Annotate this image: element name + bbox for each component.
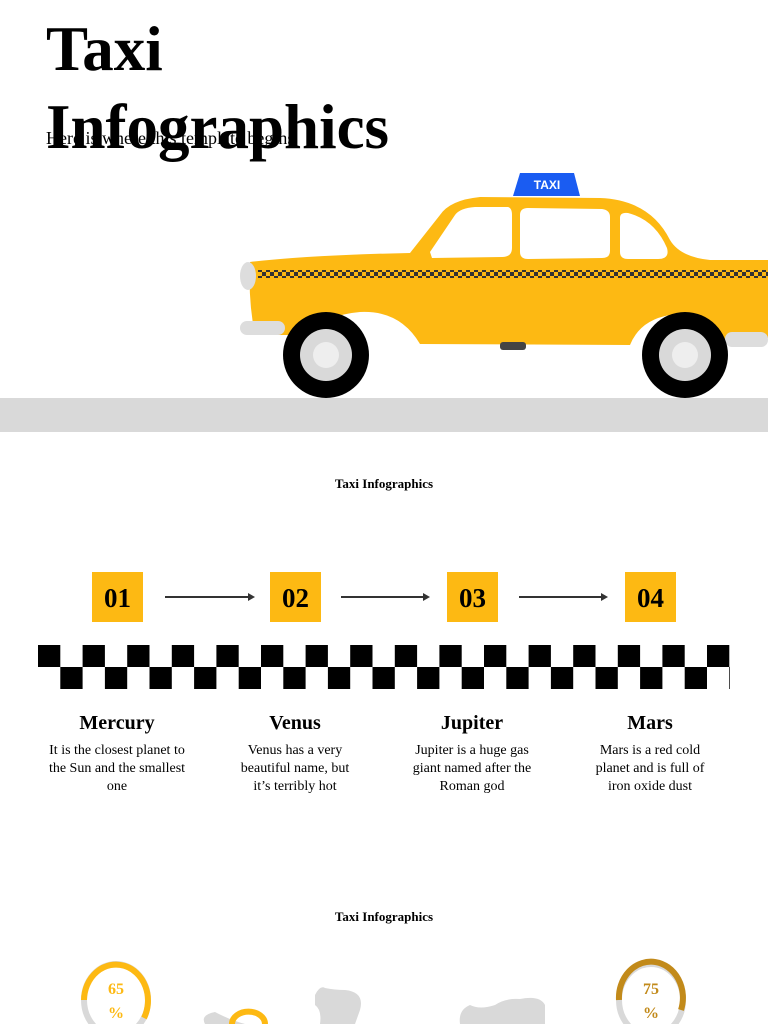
checkered band	[38, 645, 730, 689]
step numbers: 03	[459, 583, 486, 613]
chart: rings and map: 75	[643, 981, 659, 998]
step numbers: 04	[637, 583, 664, 613]
steps text: Venus has a very beautiful name, but it’s terribly hot	[241, 743, 349, 794]
steps text: Jupiter is a huge gas giant named after the Roman god	[413, 743, 531, 794]
illustration: taxi	[240, 173, 768, 398]
steps text: Jupiter	[441, 712, 503, 734]
illustration: taxi: TAXI	[534, 178, 560, 192]
steps text: It is the closest planet to the Sun and the smallest one	[49, 743, 185, 794]
chart: rings and map: 65	[108, 981, 124, 998]
chart: rings and map: %	[643, 1005, 659, 1022]
title: Infographics	[46, 92, 389, 162]
steps text: Venus	[269, 712, 321, 734]
title: Taxi	[46, 14, 163, 84]
chart: rings and map	[81, 958, 686, 1024]
steps text: Mars	[627, 712, 673, 734]
title	[46, 14, 389, 162]
section heading: Taxi Infographics	[335, 476, 433, 491]
road	[0, 398, 768, 432]
step numbers	[92, 572, 676, 622]
subtitle: Here is where this template begins	[46, 128, 294, 148]
arrow	[341, 596, 428, 598]
steps text: Mars is a red cold planet and is full of iron oxide dust	[596, 743, 704, 794]
section heading 2: Taxi Infographics	[335, 909, 433, 924]
steps text	[49, 712, 704, 794]
arrow	[519, 596, 606, 598]
steps text: Mercury	[79, 712, 155, 734]
step numbers: 01	[104, 583, 131, 613]
arrow	[165, 596, 253, 598]
chart: rings and map: %	[108, 1005, 124, 1022]
step numbers: 02	[282, 583, 309, 613]
